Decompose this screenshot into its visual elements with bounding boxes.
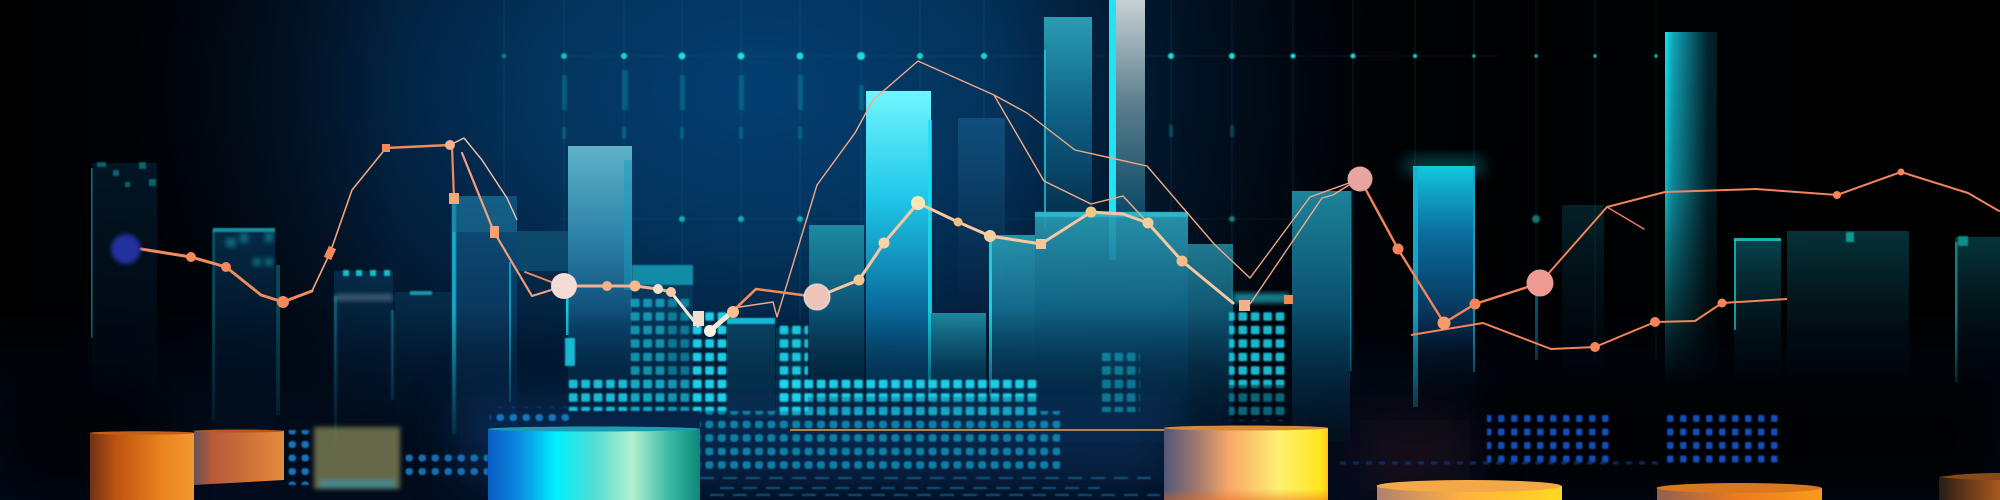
cylinder: orange front <box>90 431 194 500</box>
line series: right upper <box>1360 172 1999 323</box>
cylinder: orange back <box>194 430 284 485</box>
blurred cylinder: olive <box>314 427 400 489</box>
dot matrix panels <box>284 296 1778 485</box>
cylinder: teal gradient <box>488 426 700 500</box>
grid lines and nodes <box>502 0 1658 380</box>
bar chart: right bars <box>1405 32 2000 425</box>
markers: orange right <box>1392 168 1904 352</box>
cylinder: yellow <box>1164 426 1328 500</box>
marker: large pale circles <box>551 166 1554 310</box>
orange baseline <box>790 429 1165 431</box>
cylinder: low orange <box>1656 483 1822 500</box>
lower fade over bars <box>0 310 2000 500</box>
line series: thin upper <box>450 61 1349 317</box>
marker: blue origin <box>111 234 141 264</box>
line series: main centre <box>710 203 1233 331</box>
bar chart: left faint bars <box>91 162 451 447</box>
line series: right lower <box>1411 299 1787 349</box>
ground reflections <box>700 463 1660 495</box>
cylinder: low right edge <box>1939 473 2000 500</box>
line series: main left <box>141 145 698 326</box>
bar chart: central bars <box>452 0 1352 442</box>
markers: pale centre <box>602 196 1188 337</box>
cylinder: low yellow <box>1376 480 1562 500</box>
markers: orange left <box>186 140 499 308</box>
data markers <box>111 140 1904 352</box>
markers: squares right of centre <box>1239 300 1250 311</box>
